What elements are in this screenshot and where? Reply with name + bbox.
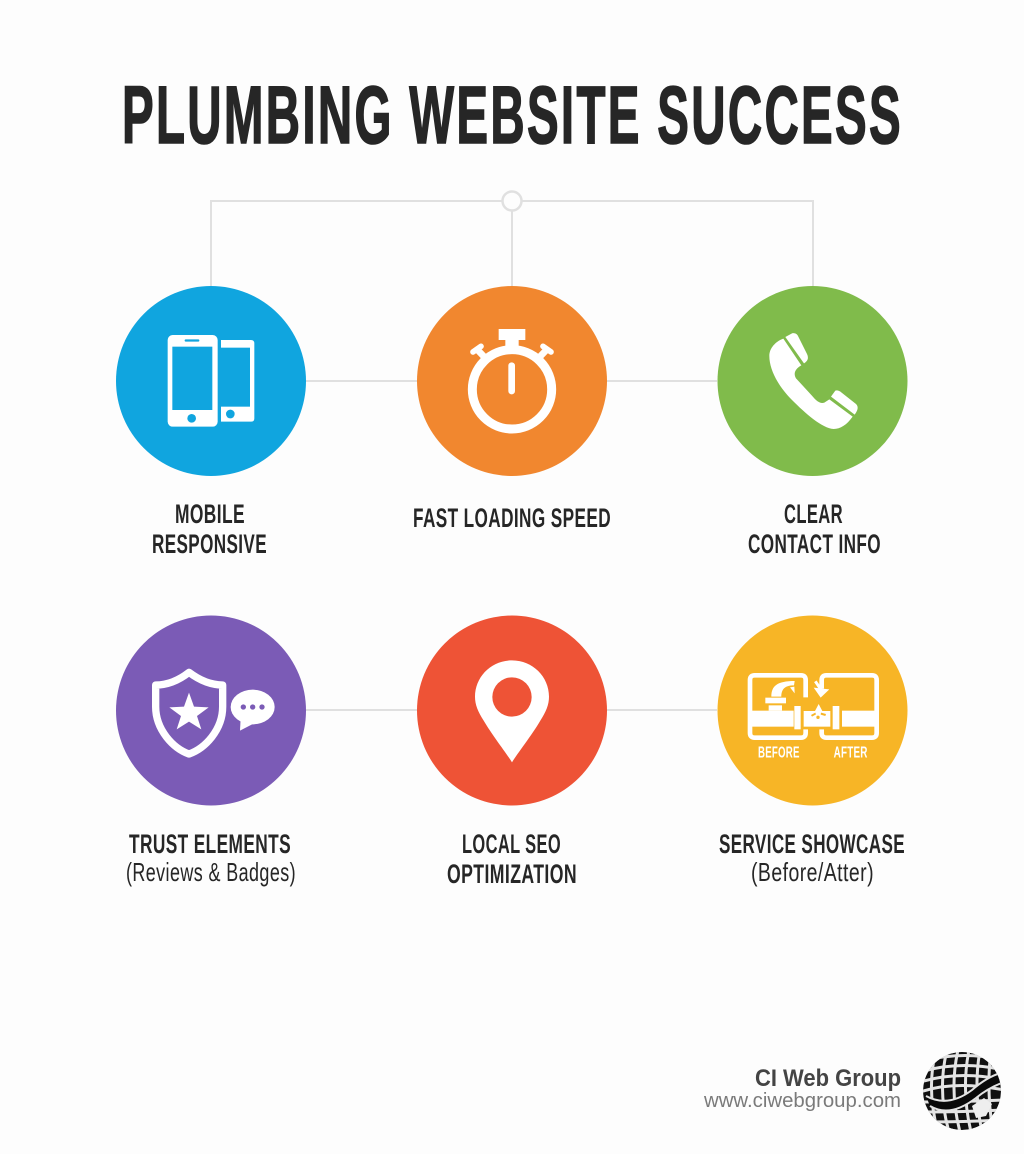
label: service showcase: SERVICE SHOWCASE xyxy=(719,829,905,859)
circle: purple xyxy=(116,616,306,806)
label: mobile responsive xyxy=(152,499,267,559)
footer brand text: www.ciwebgroup.com xyxy=(703,1090,901,1112)
circle: orange xyxy=(417,286,607,476)
label: trust elements xyxy=(126,829,296,887)
panel: trust elements xyxy=(116,616,306,887)
icon: map pin xyxy=(475,660,549,762)
label: trust elements: TRUST ELEMENTS xyxy=(129,829,291,859)
label: mobile responsive: RESPONSIVE xyxy=(152,529,267,559)
label: clear contact info: CLEAR xyxy=(784,499,843,529)
circle: green xyxy=(718,286,908,476)
infographic canvas xyxy=(116,85,1001,1130)
circle: yellow xyxy=(718,616,908,806)
panel: service showcase xyxy=(718,616,908,887)
panel: clear contact info xyxy=(718,286,908,559)
icon: speech bubble xyxy=(231,690,275,731)
footer brand text xyxy=(703,1065,901,1112)
circle: blue xyxy=(116,286,306,476)
icon: before and after pipes: BEFORE xyxy=(758,744,800,761)
label: service showcase: (Before/Atter) xyxy=(751,857,874,887)
label: fast loading speed: FAST LOADING SPEED xyxy=(413,503,611,533)
icon: telephone handset xyxy=(769,333,858,429)
label: local seo optimization xyxy=(447,829,577,889)
label: trust elements: (Reviews & Badges) xyxy=(126,857,296,887)
label: service showcase xyxy=(719,829,905,887)
label: local seo optimization: LOCAL SEO xyxy=(462,829,561,859)
panel: local seo optimization xyxy=(417,616,607,889)
icon: before and after pipes xyxy=(750,675,877,761)
icon: phones xyxy=(168,335,254,427)
label: mobile responsive: MOBILE xyxy=(175,499,245,529)
label: clear contact info: CONTACT INFO xyxy=(748,529,881,559)
panel: mobile responsive xyxy=(116,286,306,559)
connector lines xyxy=(211,192,813,710)
icon: globe logo xyxy=(923,1052,1001,1130)
label: clear contact info xyxy=(748,499,881,559)
icon: shield with star xyxy=(156,672,223,754)
panel: fast loading speed xyxy=(413,286,611,533)
icon: before and after pipes: AFTER xyxy=(834,744,868,761)
icon: stopwatch xyxy=(472,329,552,429)
label: local seo optimization: OPTIMIZATION xyxy=(447,859,577,889)
circle: red xyxy=(417,616,607,806)
footer brand text: CI Web Group xyxy=(755,1065,901,1092)
